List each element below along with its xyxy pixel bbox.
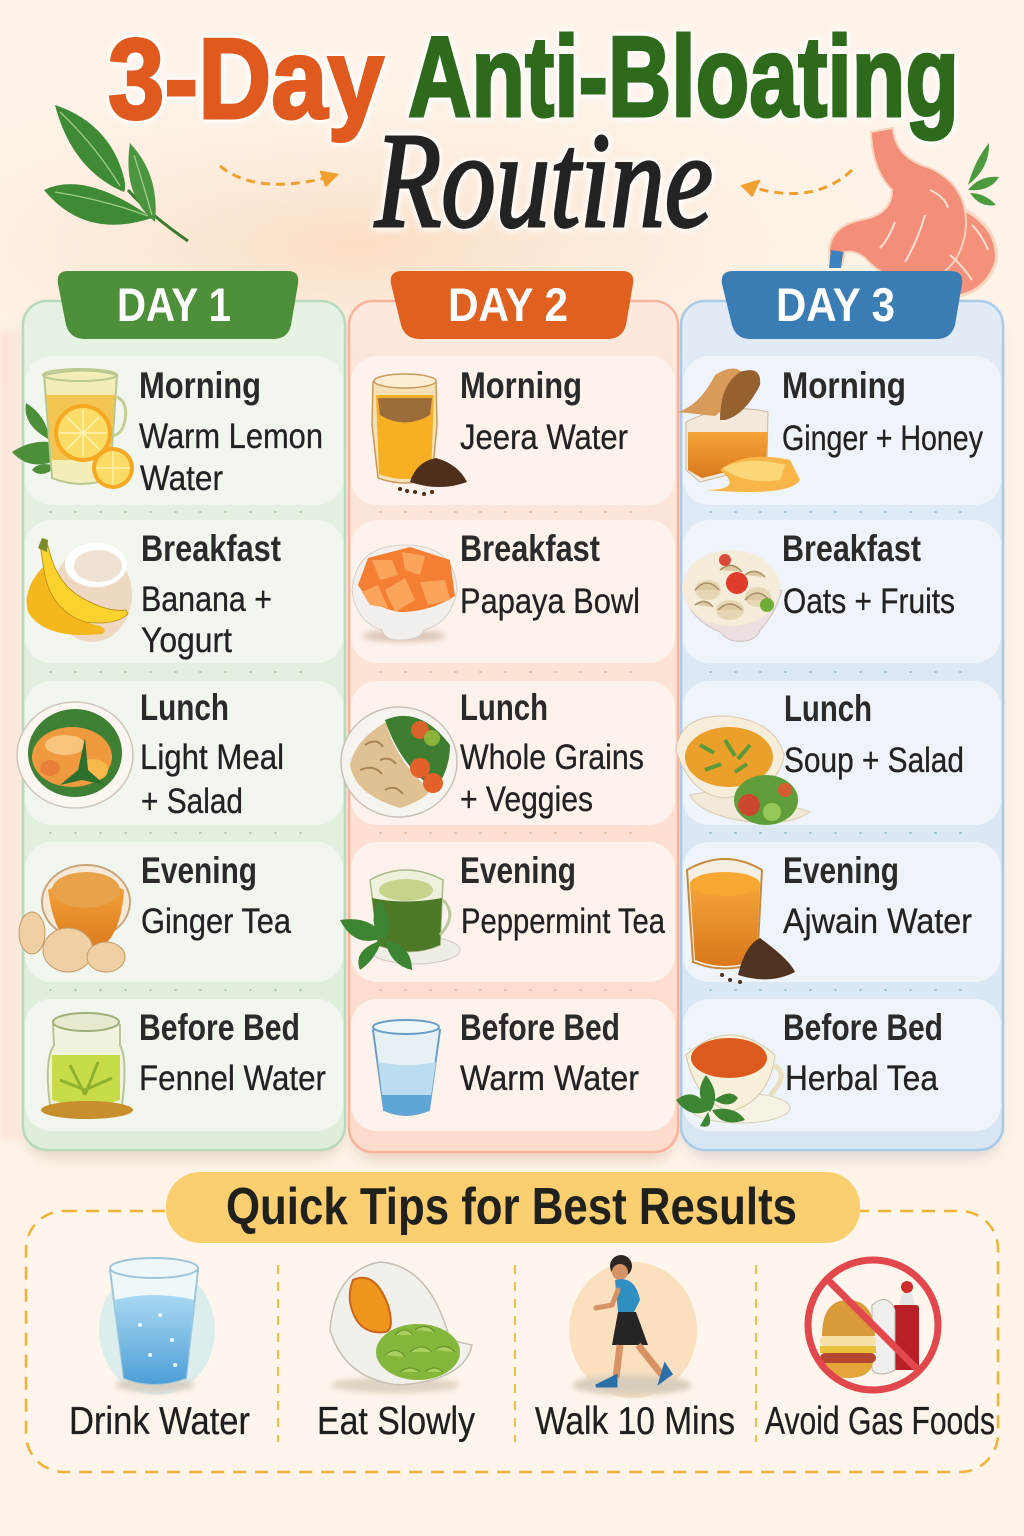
icon: oats and fruits: [682, 550, 782, 641]
icon: ginger and honey: [678, 368, 800, 492]
text: oats + fruits: Oats + Fruits: [783, 582, 955, 621]
label: lunch: Lunch: [460, 687, 548, 728]
panel: day 3: [676, 271, 1003, 1150]
icon: grains and veggies plate: [341, 707, 457, 817]
card: breakfast: [351, 520, 675, 663]
text: herbal tea: Herbal Tea: [785, 1059, 938, 1098]
text: light meal + salad: + Salad: [141, 782, 243, 821]
icon: ajwain water: [687, 859, 795, 982]
arrow: left dashed: [220, 166, 336, 186]
text: whole grains + veggies: [460, 738, 644, 819]
icon: lemon water: [12, 369, 134, 489]
card: evening: [340, 842, 675, 982]
label: morning: Morning: [139, 365, 261, 406]
icon: light meal plate: [17, 702, 133, 808]
icon: banana yogurt: [27, 538, 132, 642]
text: warm lemon water: Warm Lemon: [139, 417, 323, 456]
icon: ginger tea: [19, 865, 130, 972]
card: before bed: [25, 999, 343, 1131]
label: before bed: Before Bed: [783, 1007, 943, 1048]
label: breakfast: Breakfast: [141, 528, 281, 569]
icon: stomach: [829, 128, 999, 297]
label: evening: Evening: [141, 850, 257, 891]
tab: day 3: DAY 3: [776, 278, 895, 331]
text: ginger tea: Ginger Tea: [141, 902, 291, 941]
label: morning: Morning: [782, 365, 906, 406]
tip: eat slowly: [317, 1262, 475, 1443]
label: walk 10 mins: Walk 10 Mins: [535, 1400, 735, 1443]
card: evening: [683, 842, 1001, 982]
label: drink water: Drink Water: [69, 1400, 250, 1443]
card: morning: [12, 356, 343, 505]
text: warm water: Warm Water: [460, 1059, 639, 1098]
label: evening: Evening: [460, 850, 576, 891]
tip: walk 10 mins: [535, 1255, 735, 1443]
text: banana yogurt: [141, 580, 272, 660]
text: ajwain water: Ajwain Water: [783, 902, 972, 941]
text: whole grains + veggies: Whole Grains: [460, 738, 644, 777]
text: warm lemon water: [139, 417, 323, 498]
text: jeera water: Jeera Water: [460, 418, 628, 457]
title: Routine: Routine: [374, 106, 713, 256]
icon: fennel water jar: [41, 1013, 133, 1119]
label: before bed: Before Bed: [460, 1007, 620, 1048]
icon: warm water glass: [373, 1020, 440, 1115]
card: before bed: [676, 999, 1001, 1131]
card: breakfast: [682, 520, 1001, 663]
card: lunch: [676, 681, 1001, 825]
text: peppermint tea: Peppermint Tea: [461, 902, 665, 941]
icon: water glass: [99, 1258, 215, 1395]
label: lunch: Lunch: [784, 688, 872, 729]
label: eat slowly: Eat Slowly: [317, 1400, 475, 1443]
label: lunch: Lunch: [140, 687, 229, 728]
panel: day 2: [340, 271, 678, 1152]
tab: day 3: [722, 271, 962, 339]
icon: soup and salad: [676, 716, 810, 825]
title: [108, 14, 959, 256]
card: before bed: [351, 999, 675, 1131]
tab: day 2: [391, 271, 633, 339]
icon: plate of food: [330, 1262, 472, 1393]
text: whole grains + veggies: + Veggies: [460, 780, 593, 819]
heading: quick tips: Quick Tips for Best Results: [226, 1178, 797, 1236]
icon: green leaves: [44, 105, 188, 241]
text: banana yogurt: Yogurt: [141, 621, 232, 660]
text: soup + salad: Soup + Salad: [784, 741, 964, 780]
card: morning: [678, 356, 1001, 505]
icon: jeera water: [372, 374, 467, 494]
text: papaya bowl: Papaya Bowl: [460, 582, 640, 621]
tab: day 1: DAY 1: [117, 278, 231, 331]
text: fennel water: Fennel Water: [139, 1059, 326, 1098]
card: morning: [351, 356, 675, 505]
icon: no burger and soda: [808, 1260, 938, 1390]
label: evening: Evening: [783, 850, 899, 891]
tab: day 2: DAY 2: [448, 278, 568, 331]
label: breakfast: Breakfast: [460, 528, 600, 569]
text: warm lemon water: Water: [140, 459, 223, 498]
tip: avoid gas foods: [765, 1260, 995, 1443]
card: lunch: [341, 681, 675, 825]
text: light meal + salad: Light Meal: [140, 738, 284, 777]
panel: day 1: [12, 271, 345, 1150]
tab: day 1: [58, 271, 298, 339]
label: before bed: Before Bed: [139, 1007, 300, 1048]
icon: peppermint tea: [340, 870, 460, 970]
text: banana yogurt: Banana +: [141, 580, 272, 619]
panel: quick tips: [26, 1172, 998, 1472]
title: 3-Day: 3-Day: [108, 16, 384, 143]
icon: walking person: [569, 1255, 697, 1398]
text: ginger + honey: Ginger + Honey: [782, 419, 983, 458]
text: light meal + salad: [140, 738, 284, 821]
icon: herbal tea: [676, 1035, 790, 1127]
card: evening: [19, 842, 343, 982]
label: morning: Morning: [460, 365, 582, 406]
label: breakfast: Breakfast: [782, 528, 921, 569]
arrow: right dashed: [743, 170, 852, 196]
card: lunch: [17, 681, 343, 825]
tip: drink water: [69, 1258, 250, 1443]
icon: papaya bowl: [352, 545, 457, 642]
card: breakfast: [25, 520, 343, 663]
